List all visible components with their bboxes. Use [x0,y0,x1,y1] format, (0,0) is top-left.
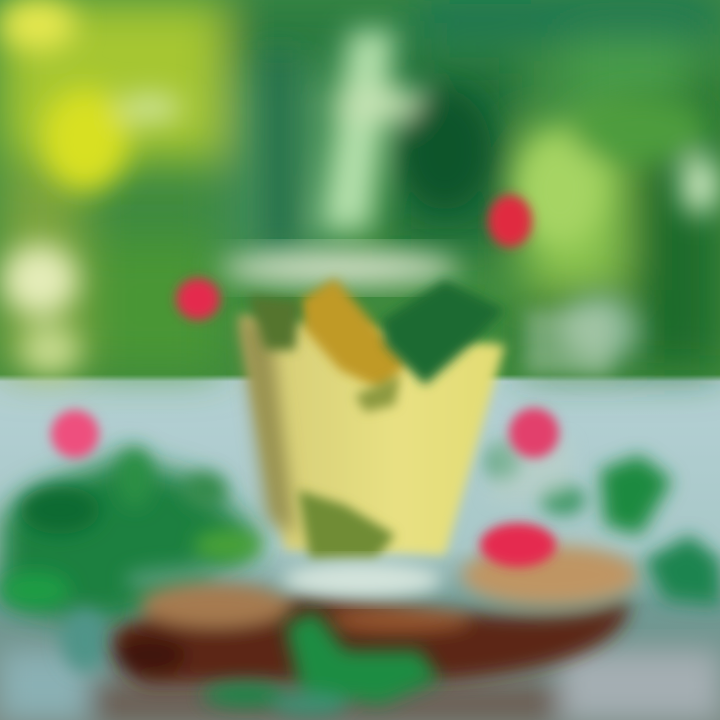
cup base [282,562,442,598]
flower: lower left [51,410,99,458]
glass outline on right [490,310,610,500]
foreground mint leaves [203,610,440,717]
raspberry on plate [480,523,556,567]
flower: left of cup [176,278,220,320]
flower: right of cup [509,408,559,458]
pink flowers [51,195,559,458]
flower: top right [488,195,532,247]
cup left shadow [240,320,295,535]
background foliage right [487,444,720,605]
drink cup [220,250,505,598]
wooden tray [112,545,638,685]
lower table shadows [0,650,720,720]
mint leaves in cup [248,280,505,560]
leaf details left [0,448,262,672]
bottom foliage left [0,450,254,622]
golden fruit [300,278,408,392]
cup body [238,315,505,555]
cup rim glow [220,250,460,286]
